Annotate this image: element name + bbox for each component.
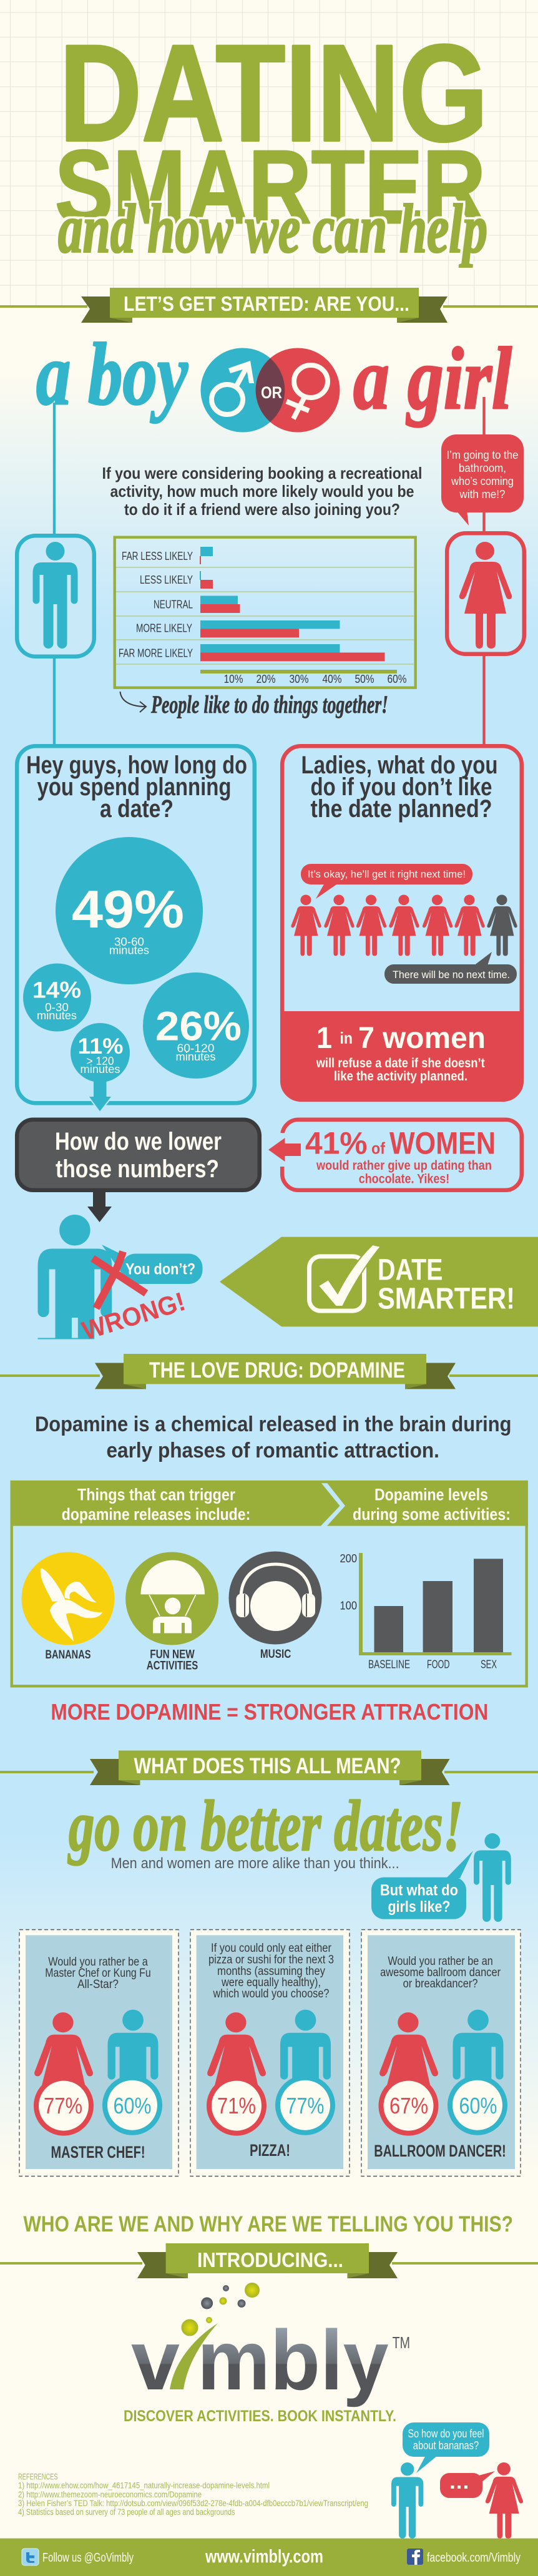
heading: hey guys xyxy=(26,752,247,823)
logo: vimbly xyxy=(131,2283,410,2407)
question: which would you choose? xyxy=(213,1987,330,2001)
callout: how do we lower: those numbers? xyxy=(56,1155,219,1183)
bar chart: likelihood: MORE LIKELY xyxy=(136,622,192,634)
speech bubble: next time: It’s okay, he’ll get it right next time! xyxy=(308,868,466,880)
bar chart: likelihood: 60% xyxy=(387,673,407,685)
arrow: down to man xyxy=(87,1192,112,1222)
heading: hey guys: you spend planning xyxy=(37,773,231,801)
bar chart: dopamine levels: 200 xyxy=(340,1552,357,1565)
bar chart: likelihood: 30% xyxy=(290,673,308,685)
figure: man 60%: 60% xyxy=(114,2093,151,2118)
bubble: 14% xyxy=(23,964,91,1031)
speech bubble: bananas xyxy=(403,2422,489,2473)
callout: 41% of women: 41% xyxy=(305,1126,367,1161)
callout: 41% of women: chocolate. Yikes! xyxy=(359,1172,449,1186)
question: months (assuming they xyxy=(217,1965,325,1978)
banner: introducing: INTRODUCING... xyxy=(197,2248,343,2271)
header: levels: during some activities: xyxy=(353,1505,511,1524)
illustration: man with wrong mark xyxy=(37,1215,202,1339)
bar chart: likelihood: FAR LESS LIKELY xyxy=(122,550,193,562)
panel: ladies dislike date xyxy=(280,746,524,1102)
icon: bananas: BANANAS xyxy=(45,1648,91,1662)
question xyxy=(45,1956,151,1991)
banner: what does this all mean xyxy=(0,1750,538,1785)
header: levels xyxy=(325,1481,528,1526)
callout arrow: date smarter: SMARTER! xyxy=(378,1282,515,1315)
header: triggers: dopamine releases include: xyxy=(62,1505,250,1524)
bar chart: likelihood: LESS LIKELY xyxy=(140,574,193,586)
figure: man 77%: 77% xyxy=(286,2093,325,2118)
card: ballroom dancer xyxy=(361,1930,521,2176)
tagline: DISCOVER ACTIVITIES. BOOK INSTANTLY. xyxy=(124,2407,396,2425)
footer xyxy=(0,2539,538,2576)
icon: man asking xyxy=(474,1833,511,1922)
stat block: 1 in 7 women: like the activity planned. xyxy=(334,1069,467,1084)
question text: activity, how much more likely would you be xyxy=(110,482,414,501)
references: 2) http://www.themezoom-neuroeconomics.com/Dopamine xyxy=(18,2490,202,2499)
speech bubble: bathroom xyxy=(441,434,524,526)
icon: man xyxy=(391,2462,423,2539)
references xyxy=(18,2472,368,2517)
question xyxy=(380,1955,501,1991)
footer: www.vimbly.com xyxy=(205,2547,323,2567)
callout: 41% of women: WOMEN xyxy=(389,1126,496,1161)
figure: woman 71% xyxy=(207,2012,266,2133)
connector line: boy xyxy=(53,403,56,744)
speech bubble: dots xyxy=(440,2471,495,2498)
bar chart: likelihood: NEUTRAL xyxy=(154,598,193,610)
icon: bananas xyxy=(21,1552,115,1662)
callout arrow: date smarter: DATE xyxy=(378,1253,443,1286)
logo: vimbly: mbly xyxy=(197,2313,389,2407)
bubble: 26% xyxy=(143,972,249,1079)
heading: ladies: do if you don’t like xyxy=(311,773,492,801)
stat block: 1 in 7 women: in xyxy=(340,1029,353,1047)
banner: what does this all mean: WHAT DOES THIS ALL MEAN? xyxy=(134,1754,401,1778)
icon: red X xyxy=(92,1251,146,1308)
question: pizza or sushi for the next 3 xyxy=(208,1954,334,1966)
statement: more dopamine: MORE DOPAMINE = STRONGER ATTRACTION xyxy=(51,1699,488,1725)
icon: gender venn circles xyxy=(201,348,340,432)
icon frame: man xyxy=(17,536,94,657)
question text xyxy=(102,464,422,519)
logo: vimbly: TM xyxy=(393,2333,410,2352)
stat block: 1 in 7 women: women xyxy=(382,1022,486,1055)
bar chart: likelihood: 40% xyxy=(322,673,342,685)
header: levels: Dopamine levels xyxy=(374,1486,488,1504)
figure: woman 77%: 77% xyxy=(44,2093,82,2118)
question xyxy=(208,1942,334,2001)
references: 3) Helen Fisher’s TED Talk: http://dotsub.com/view/096f53d2-278e-4fdb-a004-dfb0ecccb7b1/viewTranscript/eng xyxy=(18,2499,368,2508)
icon: parachute fun new activities: ACTIVITIES xyxy=(147,1659,198,1673)
bubble: 26%: 60-120 xyxy=(177,1042,215,1055)
figure: woman 77% xyxy=(34,2012,93,2133)
subheading: men and women: Men and women are more alike than you think... xyxy=(111,1855,399,1872)
question: were equally healthy), xyxy=(221,1976,321,1989)
bubble: 11%: > 120 xyxy=(86,1055,114,1067)
bar chart: likelihood: 50% xyxy=(355,673,374,685)
heading: a boy: a boy xyxy=(36,325,188,423)
question: All-Star? xyxy=(77,1978,119,1991)
icon: woman xyxy=(486,2462,523,2539)
icon: parachute fun new activities: FUN NEW xyxy=(150,1648,195,1662)
banner: the love drug: THE LOVE DRUG: DOPAMINE xyxy=(149,1358,405,1383)
figure: man 60%: 60% xyxy=(459,2093,497,2118)
callout: how do we lower xyxy=(17,1120,260,1190)
speech bubble: no next time xyxy=(384,952,517,984)
bar chart: dopamine levels: SEX xyxy=(481,1658,497,1671)
bar chart: dopamine levels: BASELINE xyxy=(368,1658,410,1671)
stat block: 1 in 7 women xyxy=(280,1011,524,1102)
icon: checkbox xyxy=(310,1245,381,1311)
arrow: left xyxy=(268,1138,301,1162)
connector line: girl xyxy=(482,397,486,744)
title xyxy=(55,16,488,268)
question text: to do it if a friend were also joining you? xyxy=(124,500,400,519)
stat block: 1 in 7 women: 1 xyxy=(316,1022,332,1055)
bubble: 14%: 0-30 xyxy=(45,1001,69,1014)
bubble: 49%: minutes xyxy=(109,944,149,957)
speech bubble: bananas: about bananas? xyxy=(413,2439,479,2452)
icon: headphones music: MUSIC xyxy=(260,1648,291,1661)
bubble: 26%: 26% xyxy=(155,1002,242,1049)
panel: guys planning time xyxy=(17,746,255,1112)
speech bubble: but what do girls like: girls like? xyxy=(388,1898,451,1916)
bubble: 26%: minutes xyxy=(176,1050,216,1063)
card: pizza xyxy=(190,1930,350,2176)
speech bubble: no next time: There will be no next time. xyxy=(393,969,510,981)
text: WRONG: WRONG! xyxy=(79,1286,188,1346)
callout: 41% of women: of xyxy=(371,1139,385,1158)
heading: ladies: the date planned? xyxy=(311,795,492,823)
banner: let's get started xyxy=(0,288,538,323)
speech bubble: bathroom: who’s coming xyxy=(451,475,514,487)
text block: dopamine definition xyxy=(35,1413,511,1462)
speech bubble: you don't: You don’t? xyxy=(125,1261,195,1278)
icon frame: woman xyxy=(447,533,524,654)
speech bubble: you don't xyxy=(102,1245,202,1284)
bar chart: likelihood: 20% xyxy=(256,673,276,685)
icon: facebook xyxy=(407,2549,423,2565)
callout: 41% of women: would rather give up dating than xyxy=(316,1158,492,1173)
bubble: 14%: minutes xyxy=(37,1009,77,1022)
icon row: seven women xyxy=(291,895,517,956)
bar chart: likelihood: FAR MORE LIKELY xyxy=(119,647,193,660)
figure: woman 71%: 71% xyxy=(217,2093,256,2118)
figure: man 60% xyxy=(105,2010,160,2133)
bar chart: dopamine levels xyxy=(340,1552,512,1671)
speech bubble: bathroom: with me!? xyxy=(459,488,506,501)
references: REFERENCES xyxy=(18,2472,58,2482)
icon: twitter xyxy=(22,2549,39,2565)
icon: parachute fun new activities xyxy=(125,1552,218,1673)
callout: how do we lower: How do we lower xyxy=(55,1128,222,1155)
bar chart: dopamine levels: 100 xyxy=(340,1599,357,1612)
question: Master Chef or Kung Fu xyxy=(45,1967,151,1980)
panel: dopamine triggers and levels xyxy=(10,1481,528,1686)
icon: headphones music xyxy=(228,1552,322,1661)
heading: ladies xyxy=(301,752,498,823)
answer: MASTER CHEF! xyxy=(51,2143,145,2162)
bar chart: dopamine levels: FOOD xyxy=(427,1658,449,1671)
speech bubble: bathroom: bathroom, xyxy=(459,462,506,474)
question text: If you were considering booking a recreational xyxy=(102,464,422,482)
heading: ladies: Ladies, what do you xyxy=(301,752,498,779)
text block: dopamine definition: early phases of romantic attraction. xyxy=(106,1439,439,1462)
figure: man 77% xyxy=(278,2010,333,2133)
question: Would you rather be an xyxy=(388,1955,493,1968)
text: OR: OR xyxy=(261,383,282,402)
arrow: curved caption arrow xyxy=(120,692,146,712)
references: 1) http://www.ehow.com/how_4617145_naturally-increase-dopamine-levels.html xyxy=(18,2481,270,2490)
speech bubble: bananas: So how do you feel xyxy=(408,2427,484,2440)
stat block: 1 in 7 women: 7 xyxy=(358,1022,374,1055)
question: Would you rather be a xyxy=(48,1956,148,1969)
callout: 41% of women xyxy=(268,1120,522,1190)
references: 4) Statistics based on survery of 73 people of all ages and backgrounds xyxy=(18,2507,235,2517)
card: master chef xyxy=(19,1930,179,2176)
banner: introducing xyxy=(0,2243,538,2278)
bar chart: likelihood: 10% xyxy=(223,673,243,685)
callout arrow: date smarter xyxy=(220,1237,538,1326)
figure: woman 67%: 67% xyxy=(389,2093,428,2118)
header: triggers: Things that can trigger xyxy=(77,1486,235,1504)
bubble: 49%: 30-60 xyxy=(114,936,144,948)
speech bubble: but what do girls like xyxy=(371,1851,473,1919)
bubble: 49%: 49% xyxy=(72,880,184,939)
bubble: 11%: minutes xyxy=(80,1063,120,1075)
footer: Follow us @GoVimbly xyxy=(42,2551,134,2565)
question: or breakdancer? xyxy=(403,1977,478,1991)
bubble: 11% xyxy=(71,1023,130,1082)
header: triggers xyxy=(10,1481,340,1526)
speech bubble: bathroom: I’m going to the xyxy=(447,449,518,461)
bubble: 14%: 14% xyxy=(32,977,81,1003)
bar chart: likelihood xyxy=(115,537,416,688)
question: If you could only eat either xyxy=(211,1942,332,1955)
banner: let's get started: LET’S GET STARTED: ARE YOU... xyxy=(124,292,409,315)
question: awesome ballroom dancer xyxy=(380,1966,501,1979)
caption: people like to do things together: People like to do things together! xyxy=(150,690,388,718)
banner: the love drug xyxy=(0,1354,538,1389)
logo: vimbly: v xyxy=(131,2313,180,2407)
answer: PIZZA! xyxy=(250,2141,290,2160)
bubble: 11%: 11% xyxy=(77,1034,124,1059)
speech bubble: next time xyxy=(301,864,472,899)
arrow: from bubbles down xyxy=(88,1074,112,1112)
heading: hey guys: a date? xyxy=(100,795,174,823)
figure: woman 67% xyxy=(379,2012,438,2133)
stat block: 1 in 7 women: will refuse a date if she doesn’t xyxy=(316,1056,485,1070)
heading: hey guys: Hey guys, how long do xyxy=(26,752,247,779)
figure: man 60% xyxy=(450,2010,505,2133)
speech bubble: but what do girls like: But what do xyxy=(380,1882,458,1899)
bubble: 49% xyxy=(56,837,203,984)
